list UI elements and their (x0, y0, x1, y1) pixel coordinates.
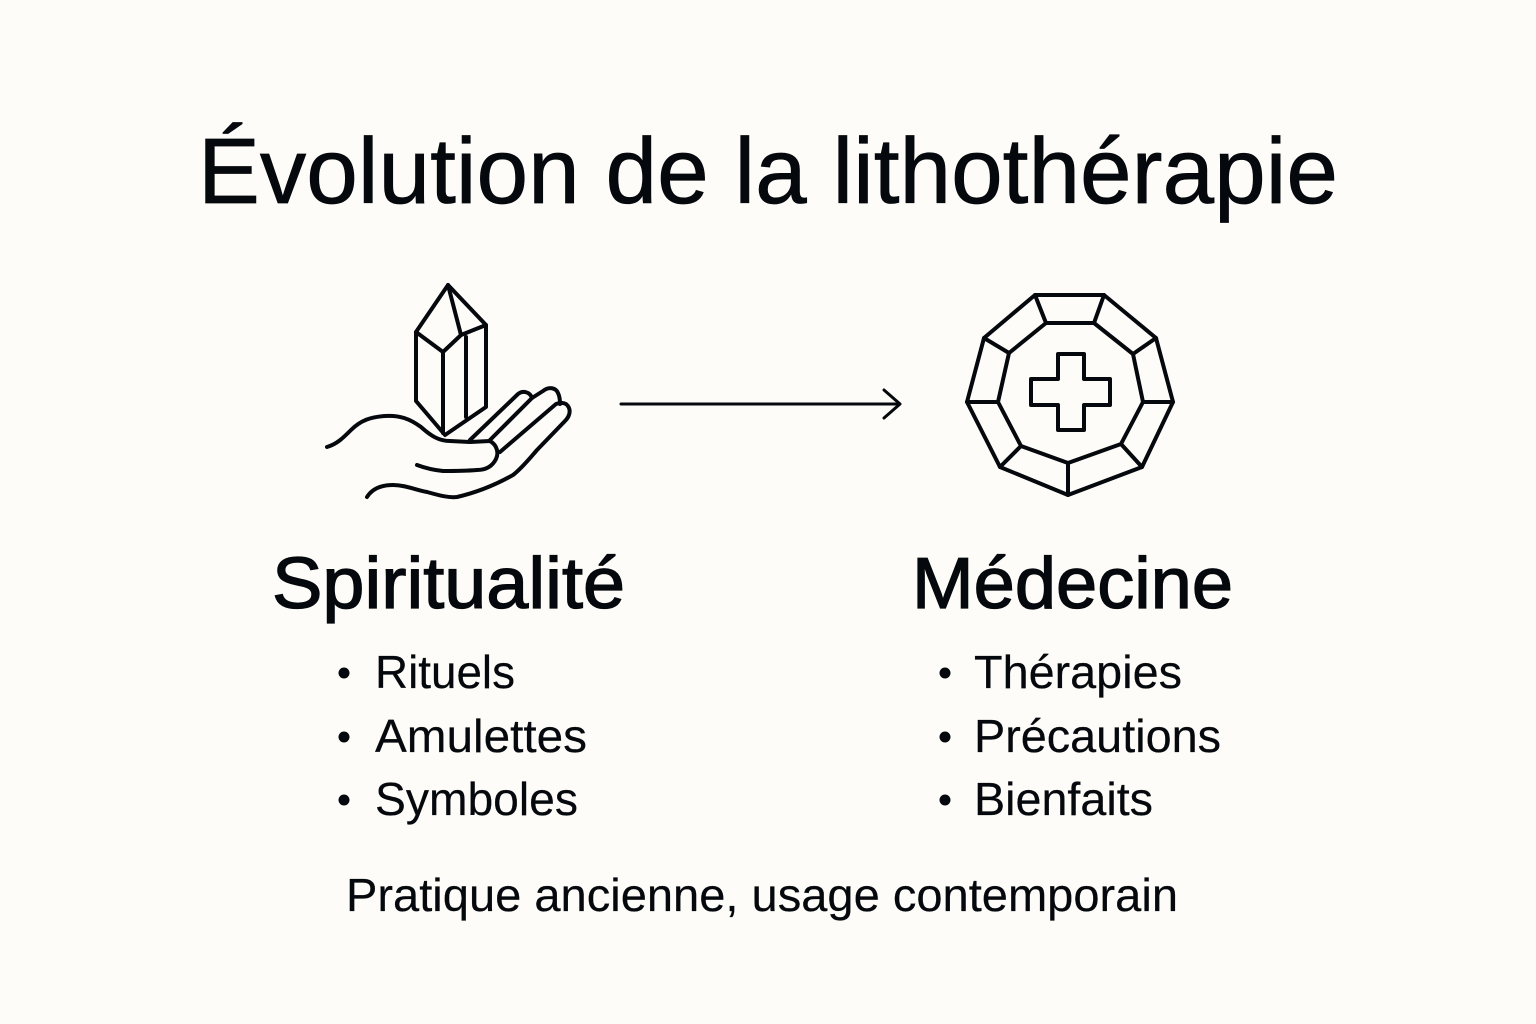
hand (327, 388, 570, 497)
list: médecine items (940, 646, 1221, 825)
icon: faceted gem with medical cross (967, 295, 1173, 495)
list: médecine items: Bienfaits (974, 773, 1153, 825)
heading: spiritualité: Spiritualité (272, 544, 625, 624)
icon: hand holding crystal (327, 285, 570, 497)
caption: Pratique ancienne, usage contemporain (346, 869, 1178, 921)
list: médecine items: Thérapies (974, 646, 1182, 698)
list: médecine items: Précautions (974, 710, 1221, 762)
medical cross (1031, 354, 1110, 430)
gem (967, 295, 1173, 495)
title: Évolution de la lithothérapie (198, 119, 1338, 223)
panel: médecine (912, 544, 1233, 825)
crystal (416, 285, 486, 435)
heading: médecine: Médecine (912, 544, 1233, 624)
list: spiritualité items: Amulettes (375, 710, 587, 762)
list: spiritualité items: Rituels (375, 646, 515, 698)
list: spiritualité items (338, 646, 587, 825)
arrow (621, 390, 900, 418)
list: spiritualité items: Symboles (375, 773, 578, 825)
panel: spiritualité (272, 544, 625, 825)
